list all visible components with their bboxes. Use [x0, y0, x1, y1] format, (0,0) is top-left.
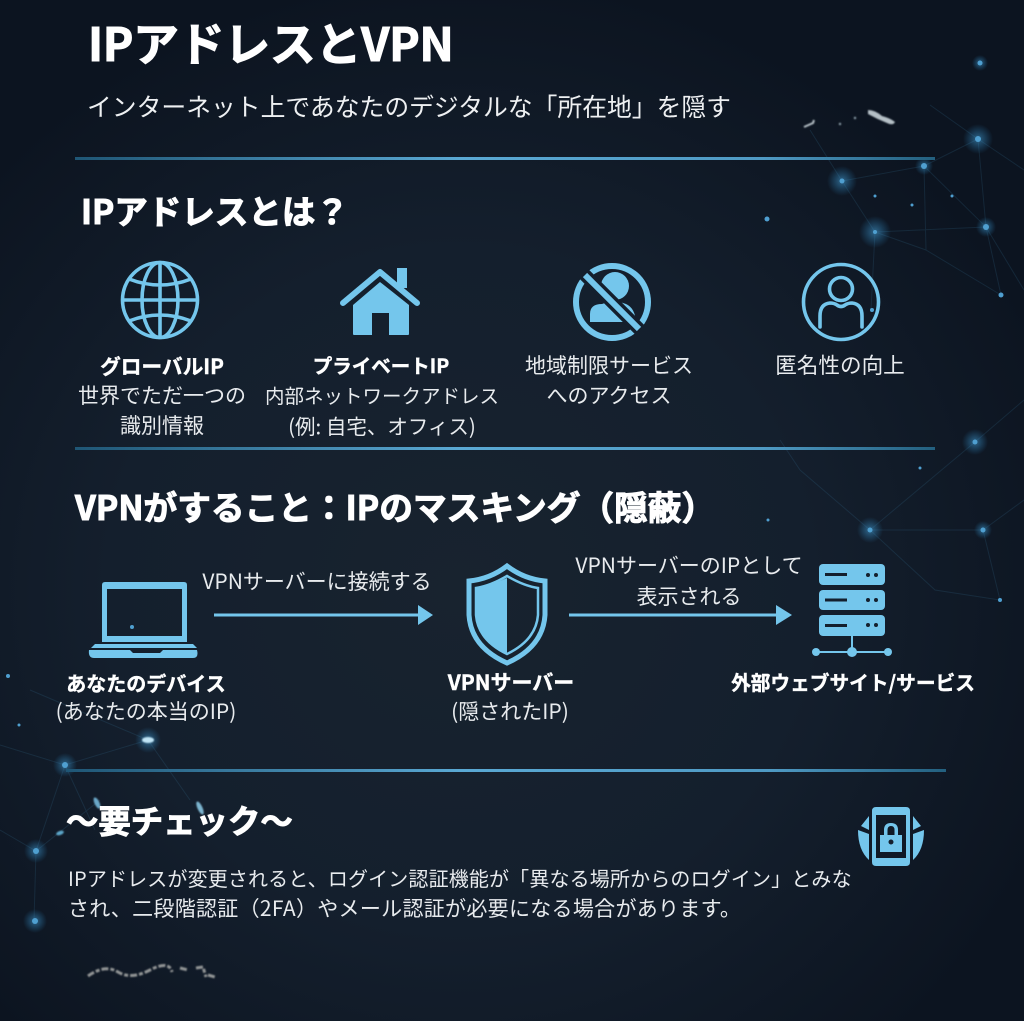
- check note text: [68, 863, 852, 923]
- anonymity text: 匿名性の向上: [775, 349, 905, 380]
- device label: あなたのデバイス: [66, 668, 226, 697]
- global IP description: [78, 380, 246, 440]
- heading: what is an IP address: IPアドレスとは？: [81, 185, 349, 234]
- global IP label: グローバルIP: [100, 350, 224, 380]
- external service label: 外部ウェブサイト/サービス: [731, 667, 975, 696]
- global IP description: 識別情報: [120, 410, 204, 440]
- icon: anonymous user: [802, 262, 880, 342]
- icon: house: [340, 268, 420, 335]
- VPN server sub label: (隠されたIP): [451, 696, 569, 726]
- heading: check: 〜要チェック〜: [66, 796, 293, 843]
- check note text: され、二段階認証（2FA）やメール認証が必要になる場合があります。: [68, 893, 741, 923]
- subtitle: インターネット上であなたのデジタルな「所在地」を隠す: [87, 88, 731, 124]
- private IP description: [265, 380, 499, 440]
- arrow: to VPN server: [214, 605, 433, 625]
- geo-restricted access text: 地域制限サービス: [525, 350, 693, 380]
- VPN server label: VPNサーバー: [448, 667, 574, 697]
- check note text: IPアドレスが変更されると、ログイン認証機能が「異なる場所からのログイン」とみな: [68, 863, 852, 892]
- title: IPアドレスとVPN: [88, 9, 453, 75]
- icon: shield: [466, 563, 548, 666]
- icon: laptop: [88, 582, 198, 658]
- private IP description: (例: 自宅、オフィス): [288, 410, 476, 440]
- connect label: VPNサーバーに接続する: [202, 566, 432, 596]
- icon: phone lock: [858, 807, 924, 866]
- global IP description: 世界でただ一つの: [78, 380, 246, 410]
- device sub label: (あなたの本当のIP): [56, 696, 236, 726]
- icon: server: [812, 564, 892, 657]
- private IP label: プライベートIP: [313, 350, 449, 379]
- geo-restricted access text: [525, 350, 693, 410]
- geo-restricted access text: へのアクセス: [547, 380, 671, 410]
- masked IP label: [575, 550, 803, 611]
- arrow: to external service: [569, 605, 792, 625]
- masked IP label: VPNサーバーのIPとして: [575, 550, 803, 580]
- icon: geo-blocked user: [573, 263, 651, 341]
- masked IP label: 表示される: [636, 581, 742, 611]
- icon: globe: [120, 260, 200, 340]
- heading: what VPN does: VPNがすること：IPのマスキング（隠蔽）: [75, 481, 715, 530]
- private IP description: 内部ネットワークアドレス: [265, 380, 499, 409]
